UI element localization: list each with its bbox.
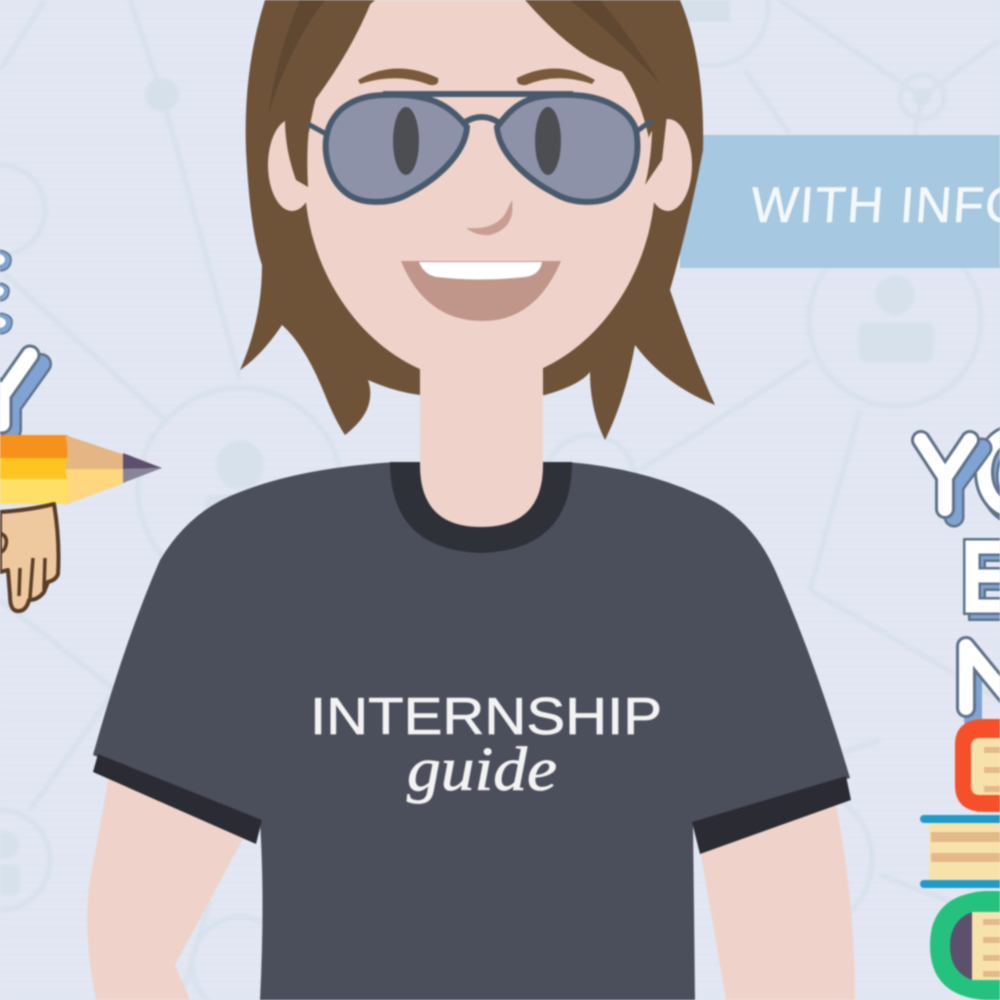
hair fringe xyxy=(275,0,672,187)
arms xyxy=(87,770,855,1000)
letter Y xyxy=(0,355,41,430)
letter fragments xyxy=(0,250,12,334)
word fragment YO xyxy=(921,434,1000,517)
sunglasses xyxy=(308,94,652,202)
shirt text: guide xyxy=(407,736,557,804)
letter E xyxy=(972,547,1000,612)
ears xyxy=(268,119,692,211)
shirt text xyxy=(310,688,662,804)
t-shirt xyxy=(93,462,851,1000)
banner xyxy=(680,135,1000,268)
shirt text: INTERNSHIP xyxy=(310,688,662,746)
letter Y xyxy=(921,440,982,517)
nose xyxy=(466,200,513,235)
pencil xyxy=(0,435,162,505)
neck xyxy=(420,360,543,527)
eyebrows xyxy=(358,68,595,85)
hair strands xyxy=(268,0,660,115)
character xyxy=(87,0,855,1000)
mouth xyxy=(401,261,561,321)
blue book xyxy=(920,815,1000,888)
hair back xyxy=(240,0,715,440)
left lettering and pencil xyxy=(0,250,162,611)
face xyxy=(305,0,655,382)
letter N xyxy=(966,646,1000,720)
hand xyxy=(0,504,58,611)
right lettering and books xyxy=(920,434,1000,1000)
red book xyxy=(955,719,1000,812)
letter O xyxy=(984,434,1000,516)
green book xyxy=(930,891,1000,1000)
